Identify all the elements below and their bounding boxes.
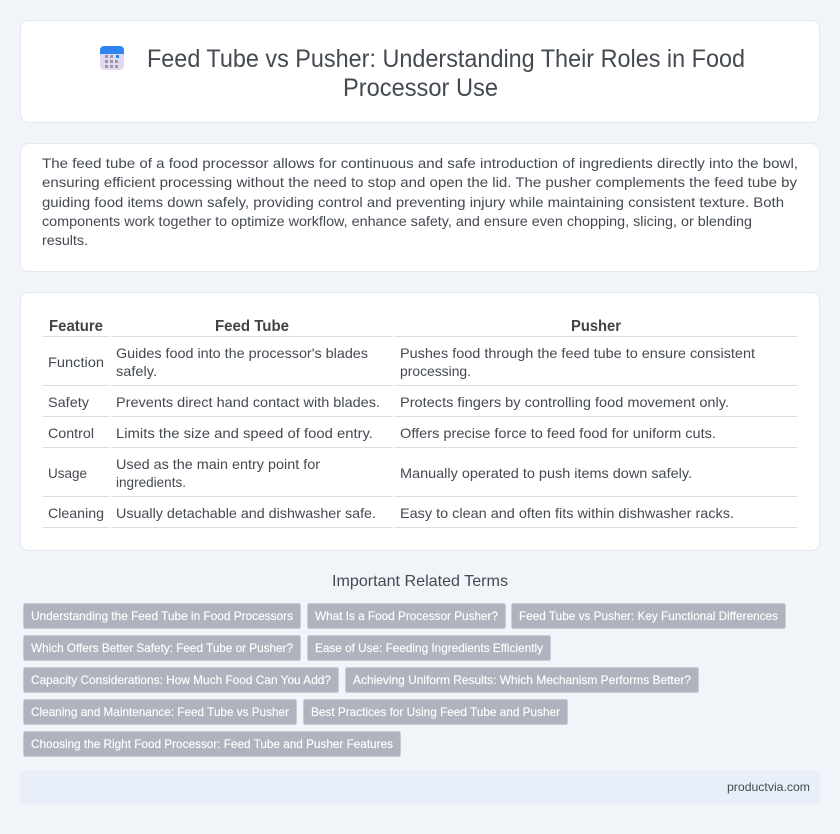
- row: cleaning: [48, 505, 734, 521]
- table header: Feed Tube: [215, 318, 289, 335]
- row: cleaning: Cleaning: [48, 505, 104, 521]
- panel: header: [20, 20, 820, 122]
- tag: [24, 668, 338, 692]
- row: usage: ingredients.: [116, 474, 186, 490]
- row: control: Control: [48, 425, 94, 441]
- text block: introduction: [42, 155, 798, 248]
- tag: Best Practices for Using Feed Tube and Pusher: [311, 705, 560, 719]
- text block: introduction: components work together to optimize workflow, enhance safety, and ensure even chopping, slicing, or blending: [42, 213, 752, 229]
- tag: [304, 700, 568, 724]
- row: safety: [48, 394, 729, 410]
- tag: Choosing the Right Food Processor: Feed Tube and Pusher Features: [31, 737, 393, 751]
- footer: [20, 770, 820, 804]
- row: safety: Prevents direct hand contact with blades.: [116, 394, 380, 410]
- row: safety: Protects fingers by controlling food movement only.: [400, 394, 729, 410]
- row: control: Limits the size and speed of food entry.: [116, 425, 373, 441]
- text block: introduction: The feed tube of a food processor allows for continuous and safe introduction of ingredients directly into the bowl,: [42, 155, 798, 171]
- row: usage: Usage: [48, 465, 87, 481]
- row: function: Function: [48, 354, 104, 370]
- row: usage: Used as the main entry point for: [116, 456, 320, 472]
- row: function: Guides food into the processor's blades: [116, 345, 368, 361]
- title: Processor Use: [343, 74, 498, 102]
- panel: comparison table: [20, 292, 820, 550]
- row: cleaning: Easy to clean and often fits within dishwasher racks.: [400, 505, 734, 521]
- tag: Feed Tube vs Pusher: Key Functional Differences: [519, 609, 778, 623]
- tag: [308, 604, 506, 628]
- tag: Understanding the Feed Tube in Food Processors: [31, 609, 293, 623]
- row: function: safely.: [116, 363, 157, 379]
- tag: [346, 668, 698, 692]
- panel: introduction: [20, 144, 820, 272]
- row: safety: Safety: [48, 394, 89, 410]
- tag: Which Offers Better Safety: Feed Tube or Pusher?: [31, 641, 293, 655]
- tag: Ease of Use: Feeding Ingredients Efficiently: [315, 641, 543, 655]
- table header: Pusher: [571, 318, 621, 335]
- row: function: [48, 345, 755, 379]
- footer: productvia.com: [727, 780, 810, 794]
- row: control: [48, 425, 716, 441]
- table rules: [43, 336, 797, 528]
- tag: Capacity Considerations: How Much Food Can You Add?: [31, 673, 331, 687]
- text block: introduction: ensuring efficient processing without the need to stop and open the lid. The pusher complements the feed tube by: [42, 174, 797, 190]
- tags: related terms: [24, 604, 786, 756]
- tag: What Is a Food Processor Pusher?: [315, 609, 498, 623]
- row: control: Offers precise force to feed food for uniform cuts.: [400, 425, 716, 441]
- row: usage: [48, 456, 692, 490]
- row: function: Pushes food through the feed tube to ensure consistent: [400, 345, 755, 361]
- text block: introduction: guiding food items down safely, providing control and preventing injury while maintaining consistent texture. Both: [42, 194, 784, 210]
- tag: [24, 700, 296, 724]
- row: function: processing.: [400, 363, 471, 379]
- table header: [49, 318, 621, 335]
- tag: [24, 604, 300, 628]
- tag: [24, 636, 300, 660]
- text block: introduction: results.: [42, 232, 88, 248]
- title: Feed Tube vs Pusher: Understanding Their Roles in Food: [147, 45, 745, 73]
- title: [147, 45, 745, 102]
- row: usage: Manually operated to push items down safely.: [400, 465, 692, 481]
- tag: [24, 732, 400, 756]
- row: cleaning: Usually detachable and dishwasher safe.: [116, 505, 376, 521]
- tag: Cleaning and Maintenance: Feed Tube vs Pusher: [31, 705, 289, 719]
- tag: [512, 604, 786, 628]
- tag: Achieving Uniform Results: Which Mechanism Performs Better?: [353, 673, 691, 687]
- table header: Feature: [49, 318, 103, 335]
- icon: calendar: [100, 46, 124, 70]
- heading: important related terms: Important Related Terms: [332, 573, 508, 590]
- tag: [308, 636, 550, 660]
